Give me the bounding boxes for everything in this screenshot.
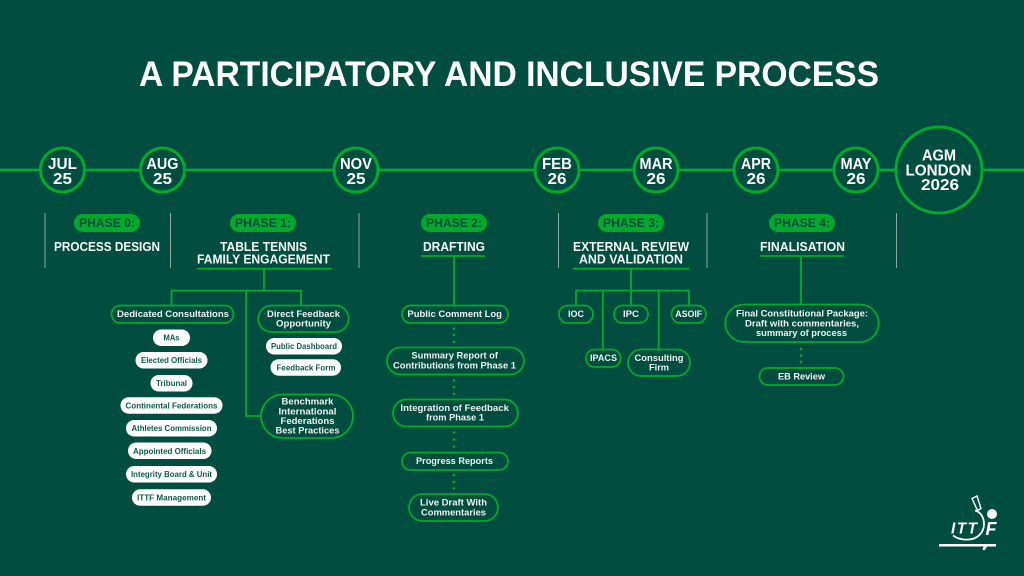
pill: feedback form — [270, 359, 341, 376]
pill: continental federations: Continental Federations — [126, 402, 218, 410]
pill: ASOIF — [672, 306, 706, 323]
pill: EB review: EB Review — [778, 371, 826, 381]
milestone: Nov 25: NOV — [340, 156, 372, 173]
pill: feedback form: Feedback Form — [276, 363, 336, 372]
pill: appointed officials: Appointed Officials — [133, 447, 207, 456]
panel: phase 4 — [725, 214, 879, 385]
pill: tribunal: Tribunal — [156, 379, 187, 388]
pill: public dashboard: Public Dashboard — [271, 342, 337, 351]
phase 3 connectors — [573, 269, 689, 350]
dotted connector — [453, 474, 455, 490]
dotted connector — [453, 379, 455, 395]
milestone: Mar 26: 26 — [646, 171, 666, 188]
pill: elected officials: Elected Officials — [141, 356, 203, 365]
pill: final constitutional package: Draft with commentaries, — [745, 319, 859, 329]
milestone: AGM London 2026 — [896, 127, 982, 213]
milestone: Jul 25: 25 — [53, 171, 72, 188]
pill: public comment log: Public Comment Log — [407, 309, 502, 319]
milestone: Nov 25 — [334, 148, 378, 192]
pill: integration of feedback: from Phase 1 — [426, 413, 484, 423]
panel: phase 2 — [387, 214, 524, 521]
phase 2 badge: PHASE 2: — [426, 218, 482, 230]
pill: benchmark international federations: International — [278, 406, 336, 416]
pill: benchmark international federations: Best Practices — [276, 426, 340, 436]
phase 1 badge: PHASE 1: — [235, 218, 291, 230]
milestone: May 26 — [834, 148, 878, 192]
pill: integrity board and unit: Integrity Board & Unit — [131, 470, 212, 479]
icon: racket and ball — [953, 496, 997, 540]
pill: athletes commission — [126, 420, 217, 436]
milestone: AGM London 2026: LONDON — [906, 162, 972, 180]
panel: phase 3 — [559, 214, 706, 376]
milestone: Jul 25: JUL — [48, 156, 77, 173]
milestone: Mar 26: MAR — [640, 156, 673, 173]
milestone: Apr 26: APR — [741, 156, 771, 173]
milestone: AGM London 2026: 2026 — [921, 177, 959, 194]
pill: consulting firm — [628, 350, 690, 376]
phase 4 heading: FINALISATION — [760, 240, 845, 254]
pill: progress reports — [402, 452, 508, 470]
phase 3 heading: AND VALIDATION — [579, 252, 683, 266]
phase 4 badge: PHASE 4: — [774, 218, 830, 230]
panel: phase 1 — [112, 214, 353, 506]
pill: IPC — [614, 306, 648, 323]
phase 2 badge — [421, 214, 487, 232]
milestone: May 26: 26 — [846, 171, 866, 188]
pill: MAs: MAs — [164, 334, 180, 343]
milestone: Apr 26: 26 — [746, 171, 766, 188]
icon: table — [939, 544, 996, 550]
panel: phase 0 — [54, 214, 160, 254]
logo wordmark: ITT: ITT — [951, 520, 979, 538]
pill: integration of feedback: Integration of Feedback — [400, 403, 510, 413]
phase 2 heading: DRAFTING — [423, 240, 485, 254]
pill: MAs — [153, 330, 190, 346]
pill: progress reports: Progress Reports — [416, 456, 493, 466]
pill: appointed officials — [128, 442, 212, 459]
pill: ITTF management — [132, 489, 211, 506]
pill: integration of feedback — [393, 400, 518, 426]
phase 3 heading: EXTERNAL REVIEW — [573, 240, 689, 254]
pill: consulting firm: Consulting — [634, 353, 684, 363]
milestone: Feb 26 — [535, 148, 579, 192]
pill: dedicated consultations — [112, 306, 234, 323]
pill: EB review — [760, 368, 844, 385]
phase 0 heading: PROCESS DESIGN — [54, 240, 160, 254]
logo: ITTF — [939, 496, 998, 550]
pill: summary report: Summary Report of — [411, 351, 499, 361]
pill: public comment log — [402, 306, 508, 323]
milestone: Feb 26: 26 — [548, 171, 567, 188]
milestone: Jul 25 — [40, 148, 84, 192]
dotted connector — [453, 431, 455, 448]
pill: IPC: IPC — [623, 309, 640, 319]
milestone: Feb 26: FEB — [542, 156, 572, 173]
phase 3 heading — [573, 240, 689, 266]
pill: tribunal — [150, 375, 192, 392]
milestone: Nov 25: 25 — [346, 171, 366, 188]
phase 1 heading: TABLE TENNIS — [220, 240, 307, 254]
phase 4 connectors — [760, 256, 844, 304]
milestone: Aug 25: AUG — [146, 156, 178, 173]
pill: benchmark international federations: Benchmark — [282, 397, 335, 407]
pill: direct feedback opportunity: Opportunity — [276, 319, 331, 329]
pill: final constitutional package — [725, 304, 879, 342]
phase 1 badge — [230, 214, 296, 232]
phase 3 badge — [598, 214, 664, 232]
pill: athletes commission: Athletes Commission — [132, 424, 212, 433]
pill: final constitutional package: Final Constitutional Package: — [736, 309, 868, 319]
milestone: Mar 26 — [634, 148, 678, 192]
dotted connector — [453, 327, 455, 343]
dotted connector — [800, 348, 802, 363]
milestone: AGM London 2026: AGM — [922, 148, 956, 164]
pill: ITTF management: ITTF Management — [137, 494, 206, 502]
pill: live draft with commentaries: Commentaries — [421, 507, 486, 517]
pill: IPACS: IPACS — [590, 353, 617, 363]
pill: IOC — [559, 306, 593, 323]
pill: summary report — [387, 348, 524, 374]
pill: IOC: IOC — [568, 309, 584, 319]
phase 3 badge: PHASE 3: — [603, 218, 659, 230]
title: A PARTICIPATORY AND INCLUSIVE PROCESS — [139, 55, 879, 94]
milestone: Apr 26 — [734, 148, 778, 192]
pill: final constitutional package: summary of process — [756, 328, 847, 338]
pill: elected officials — [136, 352, 208, 368]
timeline — [0, 127, 1024, 213]
milestone: May 26: MAY — [840, 156, 872, 173]
pill: dedicated consultations: Dedicated Consultations — [117, 309, 229, 319]
milestone: Aug 25 — [140, 148, 184, 192]
pill: live draft with commentaries: Live Draft With — [420, 498, 487, 508]
pill: direct feedback opportunity — [258, 306, 349, 332]
pill: integrity board and unit — [126, 466, 217, 482]
phase 1 heading: FAMILY ENGAGEMENT — [197, 252, 330, 266]
pill: live draft with commentaries — [409, 494, 498, 521]
pill: summary report: Contributions from Phase 1 — [393, 360, 516, 370]
phase 1 heading — [197, 240, 330, 266]
pill: IPACS — [586, 350, 620, 367]
phase 2 connectors — [421, 256, 485, 305]
pill: ASOIF: ASOIF — [675, 309, 703, 319]
pill: public dashboard — [266, 338, 342, 354]
logo wordmark: F: F — [986, 519, 998, 539]
phase 0 badge: PHASE 0: — [79, 218, 135, 230]
pill: continental federations — [120, 397, 222, 414]
pill: direct feedback opportunity: Direct Feedback — [267, 309, 341, 319]
pill: benchmark international federations: Federations — [280, 416, 334, 426]
milestone: Aug 25: 25 — [153, 171, 172, 188]
pill: benchmark international federations — [261, 394, 353, 438]
pill: consulting firm: Firm — [649, 363, 669, 373]
phase 1 connectors — [172, 269, 332, 416]
phase 4 badge — [769, 214, 835, 232]
